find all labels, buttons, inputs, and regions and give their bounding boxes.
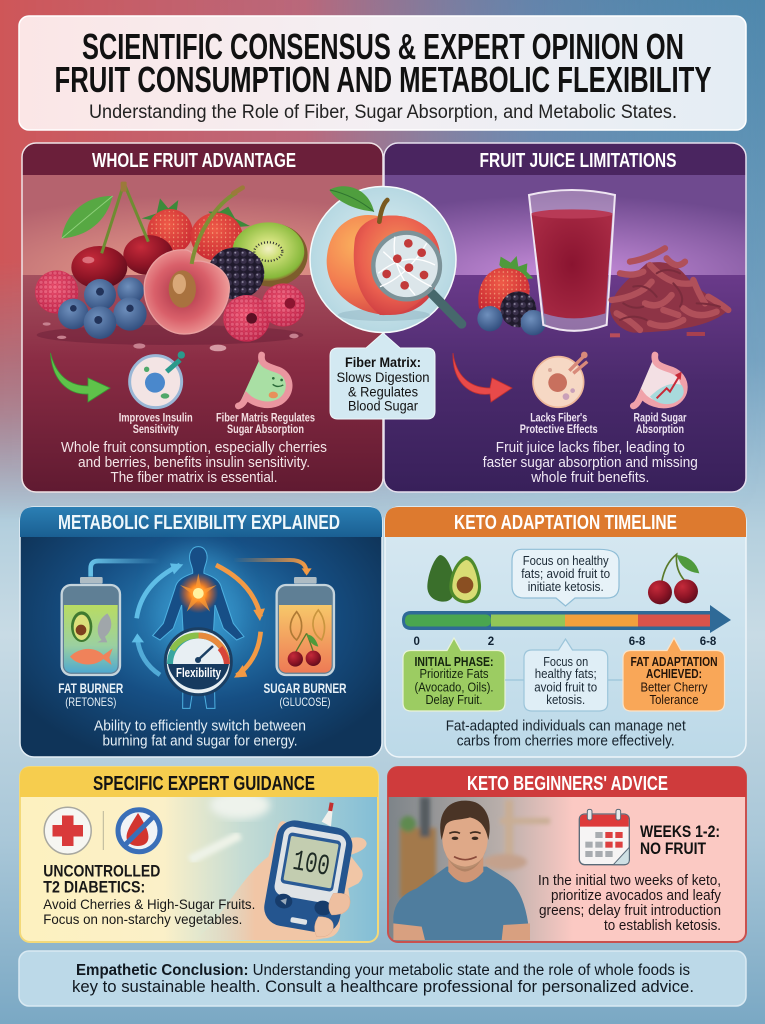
text block: timeline summary: Fat-adapted individuals can manage net (446, 718, 686, 735)
box: focus on healthy fats: avoid fruit to (534, 681, 597, 695)
box: fat adaptation achieved: Tolerance (650, 693, 699, 707)
illustration: mixed fruit (35, 182, 308, 351)
panel: whole fruit advantage (22, 143, 383, 492)
labels: drawbacks: Protective Effects (520, 424, 598, 436)
box: initial phase: (Avocado, Oils). (414, 681, 494, 695)
timeline bar: 6-8 (700, 636, 717, 648)
text block: metabolic flexibility definition (94, 718, 306, 750)
timeline bar: 2 (488, 636, 494, 648)
text block: whole fruit summary (61, 439, 327, 486)
labels: benefits: Improves Insulin (119, 413, 193, 425)
text block: juice summary: faster sugar absorption and missing (483, 454, 698, 471)
box: focus on healthy fats: ketosis. (546, 693, 585, 707)
title panel (19, 16, 746, 130)
box: focus on healthy fats: healthy fats; (535, 667, 597, 681)
heading: weeks 1-2 no fruit: WEEKS 1-2: (640, 822, 720, 841)
illustration: peach with magnifier (310, 186, 462, 332)
labels: drawbacks (520, 413, 687, 436)
box: fat adaptation achieved: ACHIEVED: (646, 667, 702, 681)
callout: fiber matrix: Fiber Matrix: (345, 355, 421, 370)
box: fat adaptation achieved (623, 638, 724, 711)
labels: drawbacks: Lacks Fiber's (530, 413, 587, 425)
labels: benefits (119, 413, 315, 436)
icon: calendar (579, 809, 629, 865)
labels: fat and sugar burner: (GLUCOSE) (280, 695, 330, 709)
timeline bar (402, 605, 731, 648)
heading: weeks 1-2 no fruit: NO FRUIT (640, 839, 706, 858)
labels: fat and sugar burner: (RETONES) (65, 695, 116, 709)
callout: fiber matrix (330, 333, 435, 419)
subtitle: Understanding the Role of Fiber, Sugar Absorption, and Metabolic States. (89, 102, 677, 123)
labels: drawbacks: Rapid Sugar (634, 413, 687, 425)
heading: fruit juice limitations: FRUIT JUICE LIMITATIONS (480, 150, 676, 172)
text block: whole fruit summary: The fiber matrix is essential. (110, 469, 278, 486)
callout: fiber matrix: Slows Digestion (336, 370, 430, 385)
box: initial phase: Prioritize Fats (420, 667, 488, 681)
heading: weeks 1-2 no fruit (640, 822, 720, 858)
gauge: flexibility: Flexibility (176, 666, 221, 680)
box: initial phase: Delay Fruit. (426, 693, 482, 707)
heading: whole fruit advantage: WHOLE FRUIT ADVANTAGE (92, 150, 296, 172)
text block: beginner advice: In the initial two weeks of keto, (538, 872, 721, 889)
panel: conclusion: key to sustainable health. Consult a healthcare professional for personalized advice. (72, 978, 694, 996)
panel: specific expert guidance (20, 767, 378, 942)
timeline bar: 6-8 (629, 636, 646, 648)
icon: stomach with rising arrow (633, 355, 684, 406)
panel: fruit juice limitations (384, 143, 746, 492)
text block: beginner advice: prioritize avocados and leafy (551, 887, 721, 904)
illustration: hand with glucose meter (195, 802, 367, 940)
text block: beginner advice: to establish ketosis. (604, 917, 721, 934)
timeline bar: 0 (413, 636, 420, 648)
icon: cell without fiber (533, 352, 588, 407)
labels: fat and sugar burner: FAT BURNER (58, 680, 123, 696)
icon: fat burner battery (62, 561, 160, 675)
text block: juice summary: Fruit juice lacks fiber, leading to (496, 439, 685, 456)
box: fat adaptation achieved: Better Cherry (640, 681, 708, 695)
callout: focus on healthy fats: initiate ketosis. (528, 579, 604, 594)
box: initial phase: INITIAL PHASE: (414, 655, 494, 669)
panel: conclusion: Empathetic Conclusion: Understanding your metabolic state and the role of whole foods is (76, 962, 690, 979)
box: fat adaptation achieved: FAT ADAPTATION (630, 655, 718, 669)
panel: metabolic flexibility explained (20, 507, 382, 757)
callout: focus on healthy fats (512, 549, 619, 606)
text block: metabolic flexibility definition: burning fat and sugar for energy. (102, 733, 298, 750)
gauge: flexibility (165, 629, 231, 695)
labels: drawbacks: Absorption (636, 424, 684, 436)
labels: fat and sugar burner: SUGAR BURNER (264, 680, 346, 696)
panel: keto beginners advice (388, 767, 746, 942)
icon: human figure and cycle arrows (132, 547, 265, 708)
illustration: hand with glucose meter: 100 (290, 845, 332, 884)
text block: uncontrolled T2 diabetics (43, 862, 255, 927)
icon: cherries (648, 554, 699, 604)
text block: timeline summary: carbs from cherries more effectively. (457, 733, 675, 750)
panel: keto adaptation timeline (385, 507, 746, 757)
callout: focus on healthy fats: fats; avoid fruit to (521, 566, 610, 581)
labels: fat and sugar burner (58, 680, 347, 709)
text block: beginner advice: greens; delay fruit introduction (539, 902, 721, 919)
callout: focus on healthy fats: Focus on healthy (523, 553, 609, 568)
icon: sugar burner battery (233, 560, 334, 675)
labels: benefits: Sugar Absorption (227, 424, 304, 436)
title (54, 26, 712, 100)
panel: conclusion (19, 951, 746, 1006)
text block: uncontrolled T2 diabetics: Focus on non-starchy vegetables. (43, 911, 242, 927)
heading: metabolic flexibility: METABOLIC FLEXIBILITY EXPLAINED (58, 512, 340, 534)
labels: benefits: Fiber Matris Regulates (216, 413, 315, 425)
icon: avocados (427, 555, 481, 603)
text block: whole fruit summary: Whole fruit consumption, especially cherries (61, 439, 327, 456)
arrow: red curved (453, 353, 512, 402)
illustration: juice glass and dried fruit (477, 190, 728, 337)
photo: smiling man in blue shirt (393, 801, 530, 940)
icon: no sugar drop (103, 810, 160, 852)
text block: uncontrolled T2 diabetics: Avoid Cherries & High-Sugar Fruits. (43, 896, 255, 912)
heading: specific expert guidance: SPECIFIC EXPERT GUIDANCE (93, 773, 315, 795)
callout: fiber matrix: & Regulates (348, 385, 418, 400)
heading: keto beginners advice: KETO BEGINNERS' ADVICE (467, 773, 668, 795)
icon: medical cross (44, 807, 91, 854)
box: focus on healthy fats: Focus on (543, 655, 588, 669)
text block: uncontrolled T2 diabetics: UNCONTROLLED (43, 862, 160, 881)
box: focus on healthy fats (505, 639, 623, 711)
icon: happy stomach (238, 355, 289, 406)
heading: keto adaptation timeline: KETO ADAPTATION TIMELINE (454, 512, 677, 534)
arrow: green curved (50, 353, 110, 402)
text block: timeline summary (446, 718, 686, 750)
text block: whole fruit summary: and berries, benefits insulin sensitivity. (78, 454, 310, 471)
text block: juice summary: whole fruit benefits. (530, 469, 649, 486)
text block: beginner advice (538, 872, 721, 934)
icon: insulin sensitive cell (130, 351, 185, 408)
callout: fiber matrix: Blood Sugar (348, 399, 418, 414)
text block: juice summary (483, 439, 698, 486)
text block: metabolic flexibility definition: Ability to efficiently switch between (94, 718, 306, 735)
labels: benefits: Sensitivity (133, 424, 179, 436)
box: initial phase (403, 638, 505, 711)
text block: uncontrolled T2 diabetics: T2 DIABETICS: (43, 878, 145, 897)
